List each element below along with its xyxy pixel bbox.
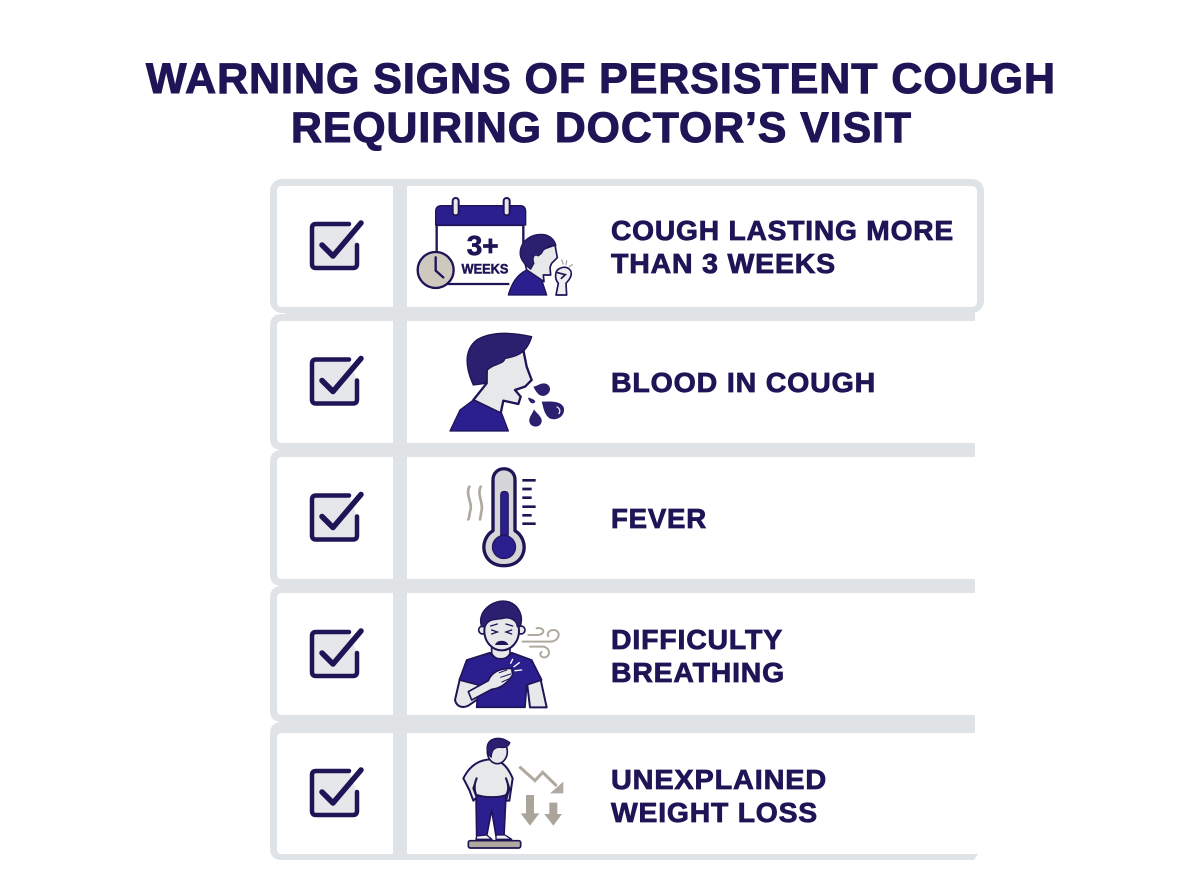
panel: row 4, difficulty breathing — [270, 586, 997, 722]
icon: calendar and coughing man: WEEKS — [461, 261, 508, 276]
label: WEIGHT LOSS — [611, 797, 818, 828]
label: COUGH LASTING MORE — [611, 215, 954, 246]
panel: row 1, cough lasting more than 3 weeks — [270, 179, 984, 321]
title — [146, 55, 1056, 152]
label: DIFFICULTY — [611, 624, 783, 655]
icon: checkbox — [312, 770, 361, 815]
icon: checkbox — [312, 631, 361, 676]
icon: calendar and coughing man: 3+ — [467, 230, 499, 261]
label: BREATHING — [611, 657, 785, 688]
panel: row 5, unexplained weight loss — [270, 722, 997, 860]
title: WARNING SIGNS OF PERSISTENT COUGH — [146, 55, 1056, 103]
label — [611, 624, 785, 688]
icon: checkbox — [312, 358, 361, 404]
icon: man coughing blood — [450, 333, 564, 431]
panel: row 2, blood in cough — [270, 314, 997, 450]
label: UNEXPLAINED — [611, 764, 827, 795]
label — [611, 215, 954, 279]
icon: checkbox — [312, 223, 361, 268]
panel: row 3, fever — [270, 450, 997, 586]
label — [611, 764, 827, 828]
title: REQUIRING DOCTOR’S VISIT — [291, 104, 912, 152]
icon: checkbox — [312, 494, 361, 540]
icon: thermometer — [468, 469, 536, 566]
icon: man on scale with weight loss arrows — [463, 738, 563, 848]
label: BLOOD IN COUGH — [611, 367, 876, 398]
label: FEVER — [611, 503, 707, 534]
icon: man with breathing difficulty — [455, 601, 559, 707]
label: THAN 3 WEEKS — [611, 248, 836, 279]
icon: calendar and coughing man — [418, 198, 580, 296]
